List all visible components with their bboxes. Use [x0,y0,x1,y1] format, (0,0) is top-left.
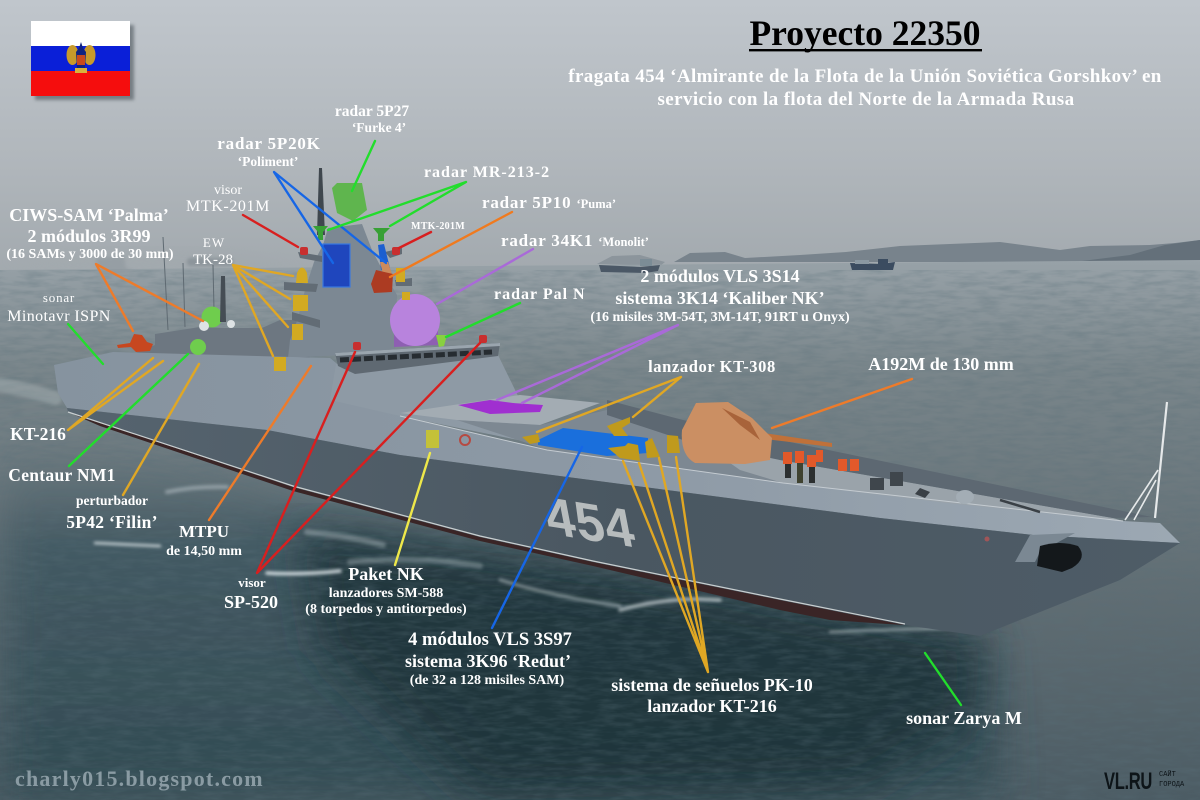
label: Centaur NM1: Centaur NM1 [8,465,116,485]
label: radar 5P20K [217,134,321,169]
label: CIWS-SAM Palma: (16 SAMs y 3000 de 30 mm) [6,247,174,262]
line: radar 34K1 [437,249,533,304]
label: VLS 3S97 Redut: sistema 3K96 ‘Redut’ [405,651,571,671]
label: VLS 3S14 Kaliber [590,266,850,325]
flag of Russia [31,21,134,100]
label: sonar Minotavr: Minotavr ISPN [7,308,111,325]
label: VLS 3S97 Redut: 4 módulos VLS 3S97 [408,630,572,650]
bulwark [607,400,1152,518]
label: radar 5P27 [335,103,409,135]
upper hull side [54,352,1180,543]
label: VLS 3S14 Kaliber: sistema 3K14 ‘Kaliber NK’ [615,288,825,308]
label: MTPU: de 14,50 mm [166,544,242,559]
line: KT-308 [537,377,681,432]
bow star [984,536,990,542]
gunwale highlight [400,416,1123,521]
thin aft antennas [163,237,214,330]
life ring [460,435,470,445]
VLS 3S97 Redut blue cells [538,428,648,456]
label: MTK-201M small: MTK-201M [411,221,465,232]
label: sonar Minotavr: sonar [43,290,75,305]
label: radar MR-213-2: radar MR-213-2 [424,164,550,181]
label: Paket NK [305,564,467,617]
line: PK-10 [623,457,708,672]
label: visor MTK-201M [186,183,270,215]
line: Paket NK [395,453,430,565]
label: lanzador KT-308: lanzador KT-308 [648,357,776,376]
label: A192M: A192M de 130 mm [868,354,1014,374]
label: MTPU: MTPU [179,522,229,541]
stern deck [54,362,113,388]
line: radar Pal N [446,303,520,337]
Paket NK hatch [426,430,439,448]
label: CIWS-SAM Palma: CIWS-SAM ‘Palma’ [9,205,169,225]
label: Paket NK: (8 torpedos y antitorpedos) [305,602,467,617]
line: visor MTK-201M [243,215,298,247]
label: perturbador Filin: 5P42 ‘Filin’ [66,512,158,532]
distant ghost ship left [96,256,233,277]
label: perturbador Filin: perturbador [76,493,148,508]
label: VLS 3S97 Redut [405,630,572,688]
dark water around hull [0,270,1200,800]
line: radar MR-213-2 [328,182,466,230]
crew in orange life vests [783,450,859,483]
deck equipment [870,472,1040,512]
label: sistema de señuelos PK-10: sistema de señuelos PK-10 [611,675,813,695]
Centaur green domes [190,306,222,355]
label: CIWS-SAM Palma [6,205,174,262]
34K1 Monolit dome [390,294,440,347]
forward superstructure [330,355,520,440]
line: Centaur NM1 [69,354,188,466]
line: radar 5P10 [390,212,512,277]
aft superstructure [113,320,310,362]
line: radar 5P20K [274,172,386,263]
label: radar 5P27: radar 5P27 [335,103,409,120]
label: radar 34K1 Monolit: radar 34K1 ‘Monolit’ [501,231,649,250]
label: radar 5P20K: radar 5P20K [217,134,321,153]
wake and foam [0,385,950,632]
line: MTPU [209,366,311,520]
label: sonar Zarya M: sonar Zarya M [906,708,1022,728]
label: sistema de señuelos PK-10 [611,675,813,716]
background: sky [0,0,1200,275]
watermark: VL.RU: ГОРОДА [1159,781,1185,789]
red MTK-201M and SP-520 units [300,247,487,350]
line: TK-28 [233,265,293,356]
line: A192M [772,379,912,428]
label: radar 5P10 Puma: radar 5P10 ‘Puma’ [482,193,616,212]
line: CIWS Palma [96,264,203,331]
ship [54,168,1180,636]
label: radar 5P20K: ‘Poliment’ [238,154,298,169]
label: KT-216: KT-216 [10,424,66,444]
line: Kaliber [497,325,678,403]
line: 5P42 Filin [123,364,199,495]
label: Paket NK: Paket NK [348,564,424,584]
5P10 Puma radar [371,262,393,293]
watermark: VL.RU: САЙТ [1159,769,1176,779]
line: KT-216 aft [68,358,163,430]
watermark: VL.RU: VL.RU [1104,768,1152,795]
white domes [199,320,235,331]
label: EW TK-28: TK-28 [193,252,233,268]
distant ship 2 [850,259,895,270]
line: Redut [492,447,582,628]
line: MTK-201M right [399,232,431,248]
subtitle [568,66,1162,110]
label: visor MTK-201M: visor [214,183,242,198]
aft mast [220,276,226,322]
label: Paket NK: lanzadores SM-588 [329,586,443,601]
label: perturbador Filin [66,493,158,532]
label: EW TK-28: EW [203,235,225,250]
title: Proyecto 22350 [749,13,981,53]
hull waterline stripe [68,412,905,624]
bow jackstaff [1125,402,1167,520]
label: CIWS-SAM Palma: 2 módulos 3R99 [27,226,151,246]
label: MTPU [166,522,242,559]
background: sea [0,260,1200,800]
label: radar 5P27: ‘Furke 4’ [352,120,406,135]
Palma CIWS orange [117,334,153,352]
MR-213 green antennas [313,226,447,347]
deck slab aft of recess [400,395,600,425]
label: visor SP-520: visor [238,575,266,590]
label: VLS 3S14 Kaliber: 2 módulos VLS 3S14 [640,266,800,286]
5P20K blue panels [323,244,390,287]
recess wall midship [457,410,783,483]
anchor housing [1015,533,1082,572]
label: VLS 3S97 Redut: (de 32 a 128 misiles SAM) [410,673,565,688]
boot-topping red stripe [68,412,905,625]
label: EW TK-28 [193,235,233,268]
label: visor SP-520: SP-520 [224,592,278,612]
5P27 Furke green radar [332,183,367,221]
line: Minotavr [68,324,103,364]
leader lines [68,141,961,705]
line: Zarya M [925,653,961,705]
VLS 3S14 Kaliber purple cells [458,400,543,414]
label: visor SP-520 [224,575,278,612]
tower platforms [284,248,412,328]
subtitle: servicio con la flota del Norte de la Armada Rusa [658,89,1075,110]
main tower [288,224,397,358]
line: SP-520 [257,343,480,573]
distant ship 1 [599,259,660,273]
subtitle: fragata 454 ‘Almirante de la Flota de la Unión Soviética Gorshkov’ en [568,66,1162,87]
distant hills [0,240,1200,268]
label: sonar Minotavr [7,290,111,325]
hull number 454: 454 [540,485,640,560]
line: radar 5P27 [352,141,375,191]
watermark: blog: charly015.blogspot.com [15,766,264,791]
bridge deck with windows [335,343,500,374]
A192M gun turret [682,402,832,464]
label: VLS 3S14 Kaliber: (16 misiles 3M-54T, 3M-14T, 91RT u Onyx) [590,310,850,325]
label: radar Pal N: radar Pal N [494,286,586,303]
dark lower hull [67,408,1180,636]
KT-216 and KT-308 yellow launchers [522,417,680,461]
foredeck [683,430,1123,521]
mast [317,168,325,235]
label: visor MTK-201M: MTK-201M [186,198,270,215]
TK-28 yellow launchers [274,268,410,371]
label: sistema de señuelos PK-10: lanzador KT-216 [647,696,777,716]
